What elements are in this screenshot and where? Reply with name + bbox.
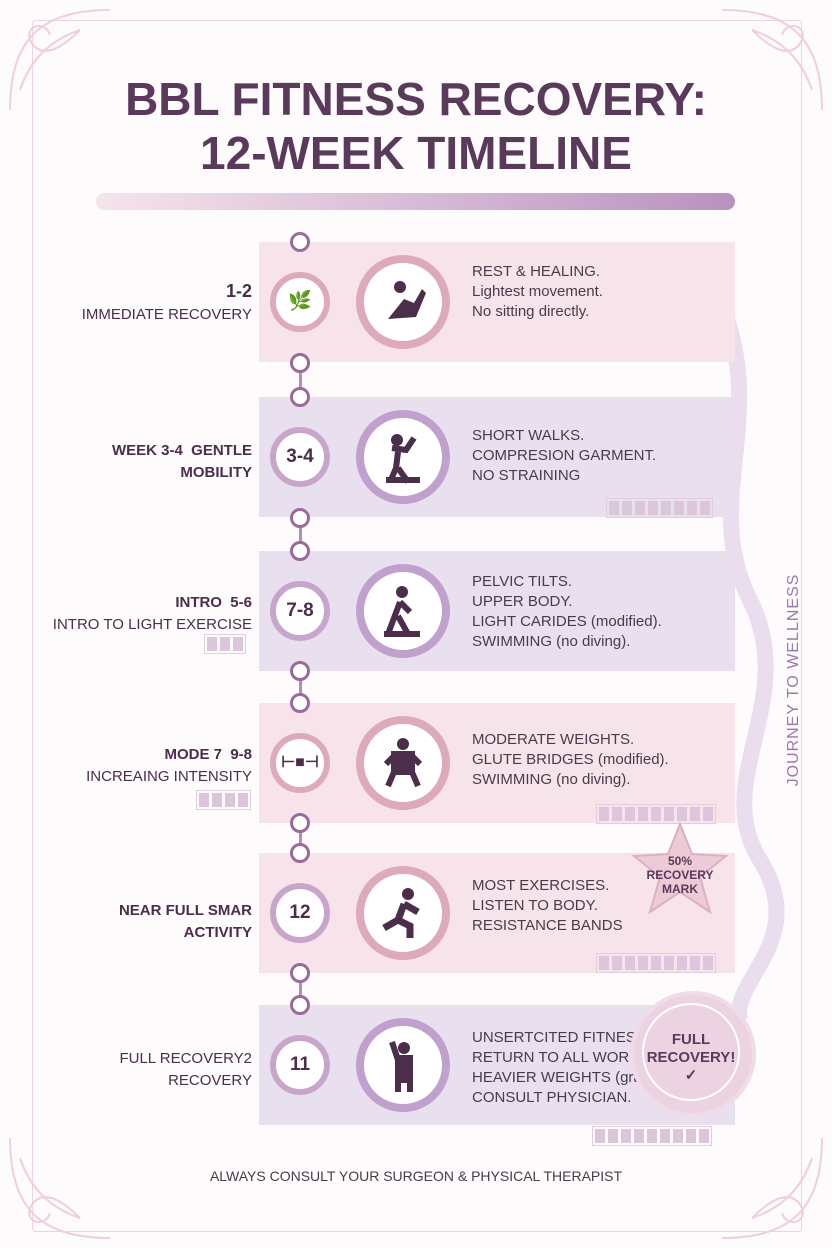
row 4 number: dumbbell: ⊢■⊣: [281, 754, 319, 771]
row 4: [259, 703, 735, 823]
vertical text: journey to wellness: JOURNEY TO WELLNESS: [785, 574, 802, 786]
star badge: 50% recovery: MARK: [662, 882, 698, 896]
row 4 squares: [596, 804, 716, 824]
corner ornament bottom-right: [722, 1138, 823, 1239]
row 2 label: WEEK 3-4 GENTLE: [112, 442, 252, 459]
row 6 label: FULL RECOVERY2: [119, 1050, 252, 1067]
row 6: [259, 1005, 735, 1125]
row 1 text: REST & HEALING.: [472, 263, 600, 280]
row 6 squares: [592, 1126, 712, 1146]
row 3: [259, 551, 735, 671]
row 6 number: [270, 1035, 330, 1095]
row 2 text: SHORT WALKS.: [472, 427, 584, 444]
row 6 text: UNSERTCITED FITNESS: [472, 1029, 646, 1046]
row 2 text: NO STRAINING: [472, 467, 580, 484]
star badge: 50% recovery: 50%: [668, 854, 692, 868]
full recovery seal: RECOVERY!: [647, 1049, 735, 1066]
row 5 number: 12: [289, 902, 311, 923]
row 3 text: UPPER BODY.: [472, 593, 573, 610]
row 6 label: [119, 1050, 252, 1089]
row 2 label: [112, 442, 252, 481]
row 3 text: SWIMMING (no diving).: [472, 633, 630, 650]
row 5 icon: [356, 866, 450, 960]
row 1 text: [472, 263, 603, 320]
row 4 text: SWIMMING (no diving).: [472, 771, 630, 788]
row 1 icon: resting: [356, 255, 450, 349]
row 4 label: MODE 7 9-8: [164, 746, 252, 763]
corner ornament top-right: [722, 9, 823, 110]
row 2 text: [472, 427, 656, 484]
row 5 label: [119, 902, 252, 941]
row 3 label: INTRO TO LIGHT EXERCISE: [53, 616, 252, 633]
title: 12-WEEK TIMELINE: [200, 127, 632, 179]
full recovery seal: ✓: [685, 1067, 697, 1084]
row 6 number: 11: [290, 1054, 310, 1075]
row 3 number: [270, 581, 330, 641]
row 5 label: NEAR FULL SMAR: [119, 902, 252, 919]
row 2 number: [270, 427, 330, 487]
row 6 text: HEAVIER WEIGHTS (gradual).: [472, 1069, 679, 1086]
star badge: 50% recovery: [632, 822, 728, 914]
title: [125, 73, 707, 179]
row 3 label: INTRO 5-6: [175, 594, 252, 611]
row 5 number: [270, 883, 330, 943]
row 3 icon: [356, 564, 450, 658]
row 3 label: [53, 594, 252, 633]
corner ornament bottom-left: [9, 1138, 110, 1239]
row 6 icon: [356, 1018, 450, 1112]
row 3 text: PELVIC TILTS.: [472, 573, 572, 590]
row 3 text: [472, 573, 662, 650]
row 2 progress squares: [606, 498, 713, 518]
row 6 label: RECOVERY: [168, 1072, 252, 1089]
row 5 text: RESISTANCE BANDS: [472, 917, 623, 934]
row 2 label: MOBILITY: [180, 464, 252, 481]
row 1 number circle: plant icon: [270, 272, 330, 332]
row 2: [259, 397, 735, 517]
row 5: [259, 853, 735, 973]
row 1 label: IMMEDIATE RECOVERY: [82, 306, 252, 323]
title: BBL FITNESS RECOVERY:: [125, 73, 707, 125]
row 2 number: 3-4: [286, 446, 314, 467]
row 4 icon: [356, 716, 450, 810]
row 1 label: 1-2: [226, 281, 252, 301]
row 6 text: CONSULT PHYSICIAN.: [472, 1089, 631, 1106]
full recovery seal: FULL: [672, 1031, 710, 1048]
row 5 text: MOST EXERCISES.: [472, 877, 609, 894]
row 1 text: No sitting directly.: [472, 303, 589, 320]
row 1 number circle: plant icon: 🌿: [288, 291, 312, 312]
row 4 label: INCREAING INTENSITY: [86, 768, 252, 785]
timeline line: [299, 240, 302, 1110]
row 4 text: [472, 731, 669, 788]
full recovery seal: [634, 995, 752, 1113]
row 2 text: COMPRESION GARMENT.: [472, 447, 656, 464]
row 5 label: ACTIVITY: [184, 924, 252, 941]
row 1 text: Lightest movement.: [472, 283, 603, 300]
ribbon decoration: [723, 318, 784, 1018]
row 4 number: dumbbell: [270, 733, 330, 793]
row 3 number: 7-8: [286, 600, 314, 621]
row 6 text: [472, 1029, 685, 1106]
star badge: 50% recovery: RECOVERY: [647, 868, 713, 882]
row 5 squares: [596, 953, 716, 973]
row 4 label: [86, 746, 252, 785]
corner ornament top-left: [9, 9, 110, 110]
progress gradient bar: [96, 193, 735, 210]
row 5 text: [472, 877, 623, 934]
row 3 text: LIGHT CARIDES (modified).: [472, 613, 662, 630]
row 5 text: LISTEN TO BODY.: [472, 897, 598, 914]
row 4 text: MODERATE WEIGHTS.: [472, 731, 634, 748]
row 2 icon: [356, 410, 450, 504]
row 3 left squares: [204, 634, 246, 654]
row 1 label: [82, 281, 252, 323]
footer: ALWAYS CONSULT YOUR SURGEON & PHYSICAL THERAPIST: [210, 1168, 622, 1184]
row 4 text: GLUTE BRIDGES (modified).: [472, 751, 669, 768]
row 6 text: RETURN TO ALL WORKOUTS.: [472, 1049, 685, 1066]
row 1: [259, 242, 735, 362]
